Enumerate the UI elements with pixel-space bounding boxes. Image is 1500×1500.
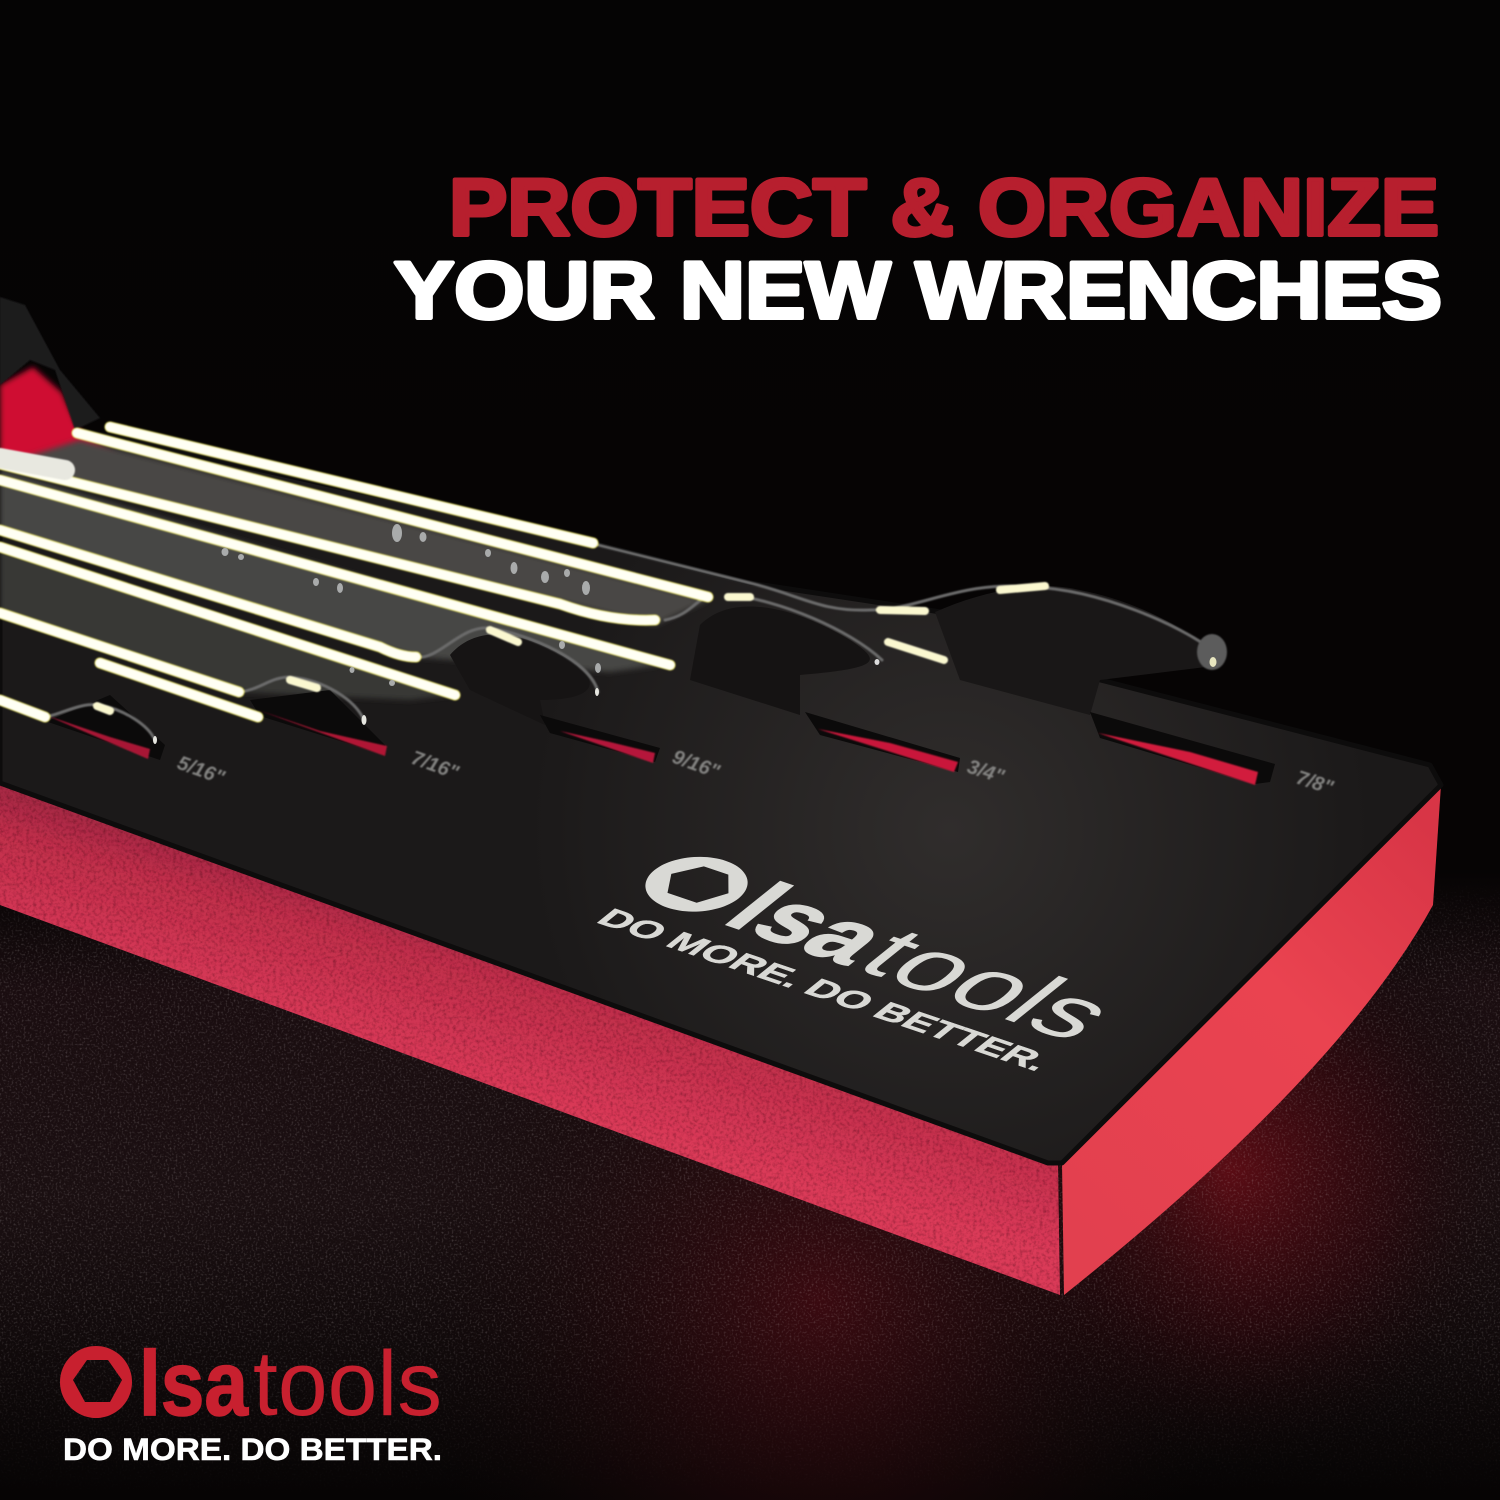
label 7/8: 7/8" xyxy=(1293,767,1336,799)
printed logo on tray xyxy=(586,838,1140,1076)
socket: 9/16 head xyxy=(450,634,590,725)
slot 3/4 xyxy=(805,712,960,772)
slot 5/16 xyxy=(48,695,165,760)
red cavity behind wrenches xyxy=(0,367,118,470)
socket: 7/8 head xyxy=(935,586,1222,715)
icon: hex O xyxy=(625,847,768,922)
panel: red foam front face xyxy=(0,780,1060,1295)
heading xyxy=(394,163,1442,336)
bright steel highlights xyxy=(0,427,708,717)
wrench head silhouette far left xyxy=(0,297,100,430)
label 5/16: 5/16" xyxy=(174,752,228,789)
heading line 1: PROTECT & ORGANIZE xyxy=(449,163,1439,253)
socket: 3/4 head xyxy=(690,606,870,715)
wordmark bold: lsa xyxy=(139,1333,249,1435)
brand logo bottom-left xyxy=(60,1333,442,1467)
size labels xyxy=(174,746,1336,799)
water-like reflections on wrenches xyxy=(153,524,1227,744)
head highlights xyxy=(0,458,1045,711)
slots xyxy=(48,690,1275,785)
label 7/16: 7/16" xyxy=(408,747,462,784)
icon: hex O xyxy=(60,1346,132,1418)
foam organizer tray xyxy=(0,297,1441,1295)
background xyxy=(0,890,1500,1500)
slot 9/16 xyxy=(540,715,660,762)
wordmark light: tools xyxy=(253,1333,442,1435)
label 9/16: 9/16" xyxy=(669,746,723,783)
reflective edges (yellow rim) xyxy=(0,427,708,717)
label 3/4: 3/4" xyxy=(964,756,1007,788)
heading line 2: YOUR NEW WRENCHES xyxy=(394,246,1442,336)
wrench bodies xyxy=(0,440,708,700)
slot 7/8 xyxy=(1090,712,1275,784)
wordmark light: tools xyxy=(836,914,1140,1055)
thin steel outlines xyxy=(45,543,1212,740)
panel: black foam top surface xyxy=(0,430,1441,1163)
tagline: DO MORE. DO BETTER. xyxy=(589,904,1060,1076)
wordmark bold: lsa xyxy=(704,869,915,979)
slot 7/16 xyxy=(250,690,385,755)
tagline: DO MORE. DO BETTER. xyxy=(63,1431,442,1467)
wrench edges xyxy=(0,427,1212,740)
panel: red foam side face xyxy=(1062,785,1441,1295)
